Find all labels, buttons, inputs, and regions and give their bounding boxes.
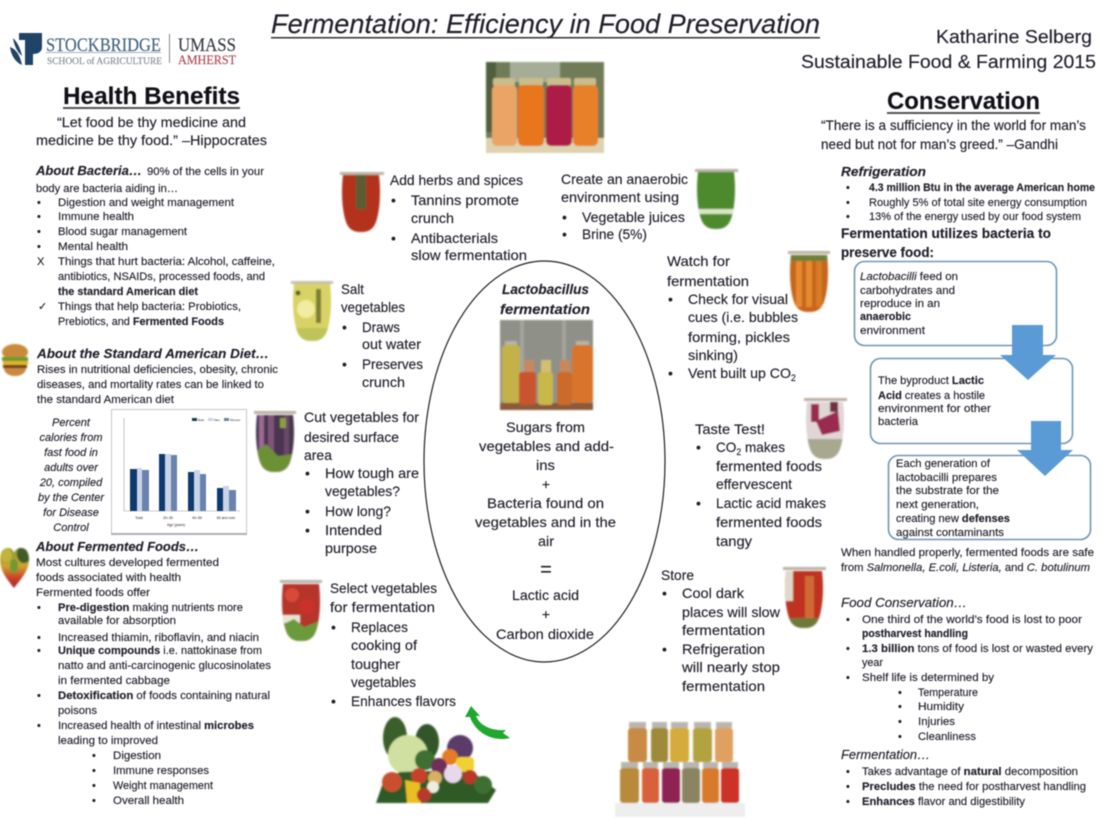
step text: sinking) [688, 347, 738, 363]
oval equation text: Bacteria found on [487, 495, 604, 511]
step text: CO [716, 439, 737, 455]
step text [304, 409, 419, 556]
step text: How long? [325, 503, 391, 519]
chart caption: adults over [44, 462, 99, 474]
text block: about fermented foods: • [92, 780, 96, 792]
author block: Katharine Selberg [936, 27, 1092, 47]
text block: about fermented foods: Fermented foods offer [36, 587, 150, 599]
step text: • [391, 192, 396, 208]
flow box: each generation: next generation, [896, 499, 979, 511]
panel: health benefits [0, 83, 279, 807]
step text: tangy [716, 533, 752, 549]
text block: about fermented foods: Weight management [113, 780, 213, 792]
oval equation text: = [540, 559, 552, 581]
text block: about bacteria: Things that help bacteria: Probiotics, [58, 301, 241, 313]
step text: • [342, 356, 347, 372]
step text: Brine (5%) [582, 226, 647, 242]
bar chart: percent calories from fast food: Total [135, 516, 143, 520]
text block: food conservation: Shelf life is determined by [862, 672, 995, 684]
text block: about bacteria: Digestion and weight management [58, 197, 234, 209]
flow box: lactobacilli feed: reproduce in an [860, 298, 940, 310]
flow box: each generation: the substrate for the [896, 485, 999, 497]
text block: about fermented foods: Immune responses [113, 765, 210, 777]
icon: burger [2, 344, 28, 376]
text block: fermentation benefits: Fermentation… [841, 747, 930, 762]
flow box: lactobacilli feed: environment [860, 325, 925, 337]
text block: refrigeration [841, 164, 1095, 260]
oval equation text: air [538, 533, 554, 549]
text block: refrigeration: • [846, 211, 850, 223]
text block: about bacteria: X [37, 256, 45, 268]
text block: food conservation: 1.3 billion tons of food is lost or wasted every [862, 643, 1094, 655]
text block: about fermented foods: Pre-digestion making nutrients more [58, 602, 243, 614]
flow box: each generation [888, 456, 1090, 540]
author block [801, 27, 1096, 72]
step text: 2 [791, 373, 796, 383]
flow box: lactic acid [870, 358, 1072, 444]
flow box: each generation: against contaminants [896, 527, 1005, 539]
text block: about fermented foods: natto and anti-carcinogenic glucosinolates [58, 660, 272, 672]
bar chart: percent calories from fast food: 40–59 [192, 516, 202, 520]
step: store [661, 567, 826, 694]
step text: How tough are [325, 465, 419, 481]
step text: fermentation [667, 273, 749, 289]
bar chart: percent calories from fast food [111, 410, 247, 535]
text block: about bacteria: • [37, 226, 41, 238]
quote: Gandhi: “There is a sufficiency in the world for man’s [821, 117, 1086, 133]
step text: Enhances flavors [351, 693, 456, 709]
text block: about fermented foods: Most cultures developed fermented [36, 557, 219, 569]
text block: food conservation: • [898, 731, 902, 743]
text block: food conservation: • [846, 672, 850, 684]
text block: standard American diet: Rises in nutritional deficiencies, obesity, chronic [37, 364, 279, 376]
step text: • [696, 439, 701, 455]
oval heading [500, 281, 590, 317]
text block: refrigeration: preserve food: [841, 245, 934, 260]
text block: about bacteria: Prebiotics, and Fermented Foods [58, 316, 224, 328]
text block: food conservation: • [898, 701, 902, 713]
text block: fermentation benefits: • [846, 766, 850, 778]
text block: about fermented foods: in fermented cabbage [58, 675, 170, 687]
step text [330, 580, 456, 709]
step: cut vegetables [254, 409, 419, 556]
panel: conservation [821, 88, 1095, 808]
text block: about fermented foods: • [92, 750, 96, 762]
photo: shelf of canned jars [615, 722, 745, 817]
flow box: lactic acid: Acid creates a hostile [878, 390, 985, 402]
text block: refrigeration: • [846, 197, 850, 209]
step text: fermented foods [716, 514, 822, 530]
step text: slow fermentation [411, 247, 527, 263]
flow box: lactic acid: environment for other [878, 403, 991, 415]
oval equation text: Carbon dioxide [496, 626, 594, 642]
text block: about fermented foods: • [37, 632, 41, 644]
flow box: lactic acid: The byproduct Lactic [878, 375, 984, 387]
text block: about fermented foods: Detoxification of foods containing natural [58, 690, 270, 702]
step text: Store [661, 567, 694, 583]
text block: food conservation: postharvest handling [862, 628, 968, 640]
text block: food conservation: • [846, 614, 850, 626]
step text: Refrigeration [682, 641, 765, 657]
icon: yellow jar [291, 281, 333, 341]
text block: about fermented foods: • [37, 645, 41, 657]
text block: about fermented foods: • [37, 602, 41, 614]
text block: about bacteria: Immune health [58, 211, 134, 223]
text block: fermentation benefits: Precludes the need for postharvest handling [862, 781, 1086, 793]
step text: Select vegetables [330, 580, 437, 596]
text block: about bacteria: Blood sugar management [58, 226, 187, 238]
oval equation text [475, 419, 616, 642]
logo: Stockbridge School of Agriculture, UMass Amherst [10, 33, 236, 67]
step text: • [562, 209, 567, 225]
step text: Replaces [351, 619, 408, 635]
author block: Sustainable Food & Farming 2015 [801, 52, 1096, 72]
step text: crunch [362, 374, 405, 390]
text block: fermentation benefits [841, 747, 1086, 808]
step text: Preserves [362, 356, 423, 372]
chart caption: calories from [40, 432, 102, 444]
step text: • [305, 503, 310, 519]
text block: about bacteria: • [37, 211, 41, 223]
step text: • [305, 465, 310, 481]
step text: fermentation [682, 678, 765, 694]
text block: about bacteria: Things that hurt bacteria: Alcohol, caffeine, [58, 256, 275, 268]
flow box: each generation: creating new defenses [896, 513, 1010, 525]
text block: refrigeration: 4.3 million Btu in the average American home [869, 182, 1095, 194]
text block: standard American diet: About the Standard American Diet… [36, 346, 269, 361]
arrow: box one to box two [1000, 325, 1056, 380]
step text [390, 172, 527, 263]
step text: • [662, 641, 667, 657]
text block: fermentation benefits: Enhances flavor and digestibility [862, 796, 1025, 808]
logo: Stockbridge School of Agriculture, UMass Amherst: SCHOOL of AGRICULTURE [47, 56, 163, 66]
step text: environment using [561, 189, 679, 205]
text block: about bacteria: Mental health [58, 241, 128, 253]
text block: food conservation: year [862, 657, 883, 669]
icon: carrot jar [788, 251, 830, 312]
icon: green jar [695, 169, 738, 229]
bar chart: percent calories from fast food: Women [230, 418, 241, 422]
step text: • [331, 619, 336, 635]
step: salt vegetables [291, 281, 423, 390]
oval equation text: Sugars from [506, 419, 585, 435]
step: watch for fermentation [667, 251, 830, 383]
step text: • [662, 585, 667, 601]
step text: Vegetable juices [582, 209, 685, 225]
step text: • [391, 230, 396, 246]
quote: Hippocrates: “Let food be thy medicine and [57, 114, 246, 130]
icon: red pepper jar [783, 567, 826, 628]
step text: Vent built up CO [688, 365, 790, 381]
icon: red jar [340, 172, 384, 232]
oval equation text: vegetables and add- [479, 438, 614, 454]
bar chart: percent calories from fast food: Men [214, 418, 220, 422]
step text: Lactic acid makes [716, 495, 826, 511]
step text: Check for visual [688, 291, 788, 307]
oval equation text: + [542, 606, 550, 622]
step text [667, 253, 798, 383]
icon: eggplant jar [254, 411, 296, 472]
logo: Stockbridge School of Agriculture, UMass Amherst: AMHERST [178, 52, 236, 67]
oval: lactobacillus fermentation [424, 261, 665, 662]
step text: purpose [325, 540, 377, 556]
text block: food conservation: • [898, 687, 902, 699]
oval heading: fermentation [500, 301, 590, 317]
text block: refrigeration: • [846, 182, 850, 194]
text block: refrigeration: Refrigeration [841, 164, 926, 179]
flow box: lactic acid: bacteria [878, 416, 919, 428]
logo: Stockbridge School of Agriculture, UMass Amherst: STOCKBRIDGE [46, 35, 161, 56]
step text: • [696, 495, 701, 511]
step text: cooking of [351, 637, 417, 653]
oval equation text: ins [536, 457, 555, 473]
step text [341, 281, 423, 390]
icon: mixed vegetable jar [280, 580, 322, 641]
step text: Create an anaerobic [561, 171, 688, 187]
text block: standard American diet: diseases, and mortality rates can be linked to [37, 379, 264, 391]
chart caption: 20, compiled [39, 477, 103, 489]
text block: fermentation benefits: • [846, 796, 850, 808]
text block: about bacteria: the standard American diet [58, 286, 198, 298]
text block: about fermented foods: • [92, 765, 96, 777]
text block: about bacteria: About Bacteria… [35, 163, 142, 178]
quote: Hippocrates [36, 114, 267, 148]
text block: food conservation: Humidity [918, 701, 965, 713]
step text: Add herbs and spices [390, 172, 523, 188]
text block: about fermented foods: About Fermented Foods… [35, 539, 199, 554]
text block: refrigeration: 13% of the energy used by our food system [869, 211, 1081, 223]
flow box: lactobacilli feed: Lactobacilli feed on [860, 271, 958, 283]
step text: vegetables [351, 674, 416, 690]
step text: Salt [341, 281, 364, 297]
step text: tougher [351, 656, 400, 672]
step text: for fermentation [330, 599, 435, 615]
text block: about fermented foods: • [92, 795, 96, 807]
step text: Intended [325, 522, 382, 538]
text block: standard American diet [36, 346, 279, 406]
text block: food conservation: Food Conservation… [841, 595, 967, 610]
text block: food conservation: Temperature [918, 687, 978, 699]
oval heading: Lactobacillus [502, 281, 589, 297]
text block: about fermented foods: leading to improved [58, 735, 158, 747]
step: taste test [695, 398, 847, 549]
quote: Hippocrates: medicine be thy food.” –Hippocrates [36, 132, 267, 148]
step text: vegetables [341, 299, 405, 315]
chart caption: Percent [52, 417, 91, 429]
step text: vegetables? [325, 483, 400, 499]
text block: food conservation: Injuries [918, 716, 956, 728]
bar chart: percent calories from fast food: 20–39 [163, 516, 173, 520]
step text: will nearly stop [681, 659, 780, 675]
title: Fermentation: Efficiency in Food Preservation [271, 9, 820, 39]
text block: food safety note: from Salmonella, E.coli, Listeria, and C. botulinum [841, 562, 1090, 574]
bar chart: percent calories from fast food: 60 and over [217, 516, 236, 520]
step: select vegetables [280, 580, 456, 709]
step text: Cool dark [682, 585, 745, 601]
text block: about fermented foods: Overall health [113, 795, 184, 807]
text block: about fermented foods: Unique compounds i.e. nattokinase from [58, 645, 262, 657]
text block: about fermented foods: available for absorption [58, 615, 176, 627]
photo: pile of vegetables [376, 717, 496, 803]
oval equation text: Lactic acid [512, 587, 579, 603]
text block: food conservation: • [846, 643, 850, 655]
text block: refrigeration: Fermentation utilizes bacteria to [841, 226, 1051, 241]
step text: Taste Test! [695, 421, 765, 437]
quote: Gandhi [821, 117, 1086, 152]
chart caption: by the Center [38, 492, 105, 504]
text block: food conservation: Cleanliness [918, 731, 976, 743]
step text: • [305, 522, 310, 538]
step text: Antibacterials [411, 230, 498, 246]
text block: refrigeration: Roughly 5% of total site energy consumption [869, 197, 1087, 209]
text block: about fermented foods: foods associated with health [36, 572, 181, 584]
step text: • [668, 291, 673, 307]
step text: out water [362, 336, 421, 352]
step text: 2 [736, 447, 741, 457]
text block: about bacteria: 90% of the cells in your [147, 166, 264, 178]
step text: makes [741, 439, 785, 455]
step text: • [331, 693, 336, 709]
icon: fruit and vegetable heart [0, 545, 31, 588]
text block: about fermented foods: Digestion [113, 750, 161, 762]
text block: about fermented foods: poisons [58, 705, 98, 717]
flow box: lactobacilli feed: carbohydrates and [860, 285, 955, 297]
text block: fermentation benefits: • [846, 781, 850, 793]
heading: conservation: Conservation [887, 88, 1040, 115]
step text: fermentation [682, 622, 765, 638]
icon: beet jar [804, 398, 847, 459]
chart caption [38, 417, 105, 534]
text block: about bacteria: body are bacteria aiding in… [36, 183, 178, 195]
flow box: each generation: lactobacilli prepares [896, 472, 998, 484]
step: create an anaerobic environment [561, 169, 738, 242]
text block: standard American diet: the standard American diet [37, 394, 174, 406]
chart caption: fast food in [44, 447, 98, 459]
step text: • [342, 319, 347, 335]
photo: jars on a table [500, 320, 593, 410]
step: add herbs and spices [340, 172, 527, 263]
oval equation text: + [542, 476, 550, 492]
text block: about fermented foods: • [37, 690, 41, 702]
chart caption: for Disease [43, 507, 99, 519]
step text: Draws [362, 319, 400, 335]
oval equation text: vegetables and in the [475, 514, 616, 530]
text block: about fermented foods [35, 539, 272, 807]
flow box: lactobacilli feed: anaerobic [860, 311, 911, 323]
bar chart: percent calories from fast food: Age (years) [167, 523, 185, 527]
text block: about fermented foods: • [37, 720, 41, 732]
text block: about bacteria: • [37, 197, 41, 209]
bar chart: percent calories from fast food: Both [198, 418, 205, 422]
text block: about bacteria: • [37, 241, 41, 253]
text block: food safety note [841, 547, 1094, 574]
text block: food safety note: When handled properly, fermented foods are safe [841, 547, 1094, 559]
quote: Gandhi: need but not for man’s greed.” –Gandhi [821, 136, 1058, 152]
step text: places will slow [682, 604, 781, 620]
step text: Cut vegetables for [304, 409, 419, 425]
step text: cues (i.e. bubbles [688, 309, 798, 325]
text block: about bacteria: ✓ [38, 300, 47, 313]
photo: four jars of ferments [486, 62, 604, 153]
step text: area [304, 447, 332, 463]
flow box: lactobacilli feed [854, 262, 1056, 346]
step text: forming, pickles [688, 329, 790, 345]
logo: Stockbridge School of Agriculture, UMass Amherst: UMASS [178, 35, 236, 56]
step text: • [562, 226, 567, 242]
text block: food conservation: One third of the world’s food is lost to poor [862, 614, 1082, 626]
step text [695, 421, 826, 549]
step text: Tannins promote [411, 192, 519, 208]
step text: fermented foods [716, 458, 822, 474]
chart caption: Control [53, 522, 89, 534]
text block: about fermented foods: Increased health of intestinal microbes [58, 720, 254, 732]
step text [661, 567, 781, 694]
arrow: box two to box three [1017, 421, 1073, 476]
step text: • [668, 365, 673, 381]
step text [561, 171, 688, 242]
text block: about bacteria: antibiotics, NSAIDs, processed foods, and [58, 271, 265, 283]
step text: desired surface [304, 429, 399, 445]
text block: about fermented foods: Increased thiamin, riboflavin, and niacin [58, 632, 259, 644]
step text: crunch [411, 210, 454, 226]
text block: fermentation benefits: Takes advantage of natural decomposition [862, 766, 1078, 778]
step text: Watch for [667, 253, 730, 269]
text block: about bacteria [35, 163, 275, 328]
arrow: green curved arrow [465, 706, 510, 739]
text block: food conservation: • [898, 716, 902, 728]
step text: effervescent [716, 476, 792, 492]
heading: health benefits: Health Benefits [63, 83, 240, 110]
flow box: each generation: Each generation of [896, 458, 991, 470]
text block: food conservation [841, 595, 1094, 743]
